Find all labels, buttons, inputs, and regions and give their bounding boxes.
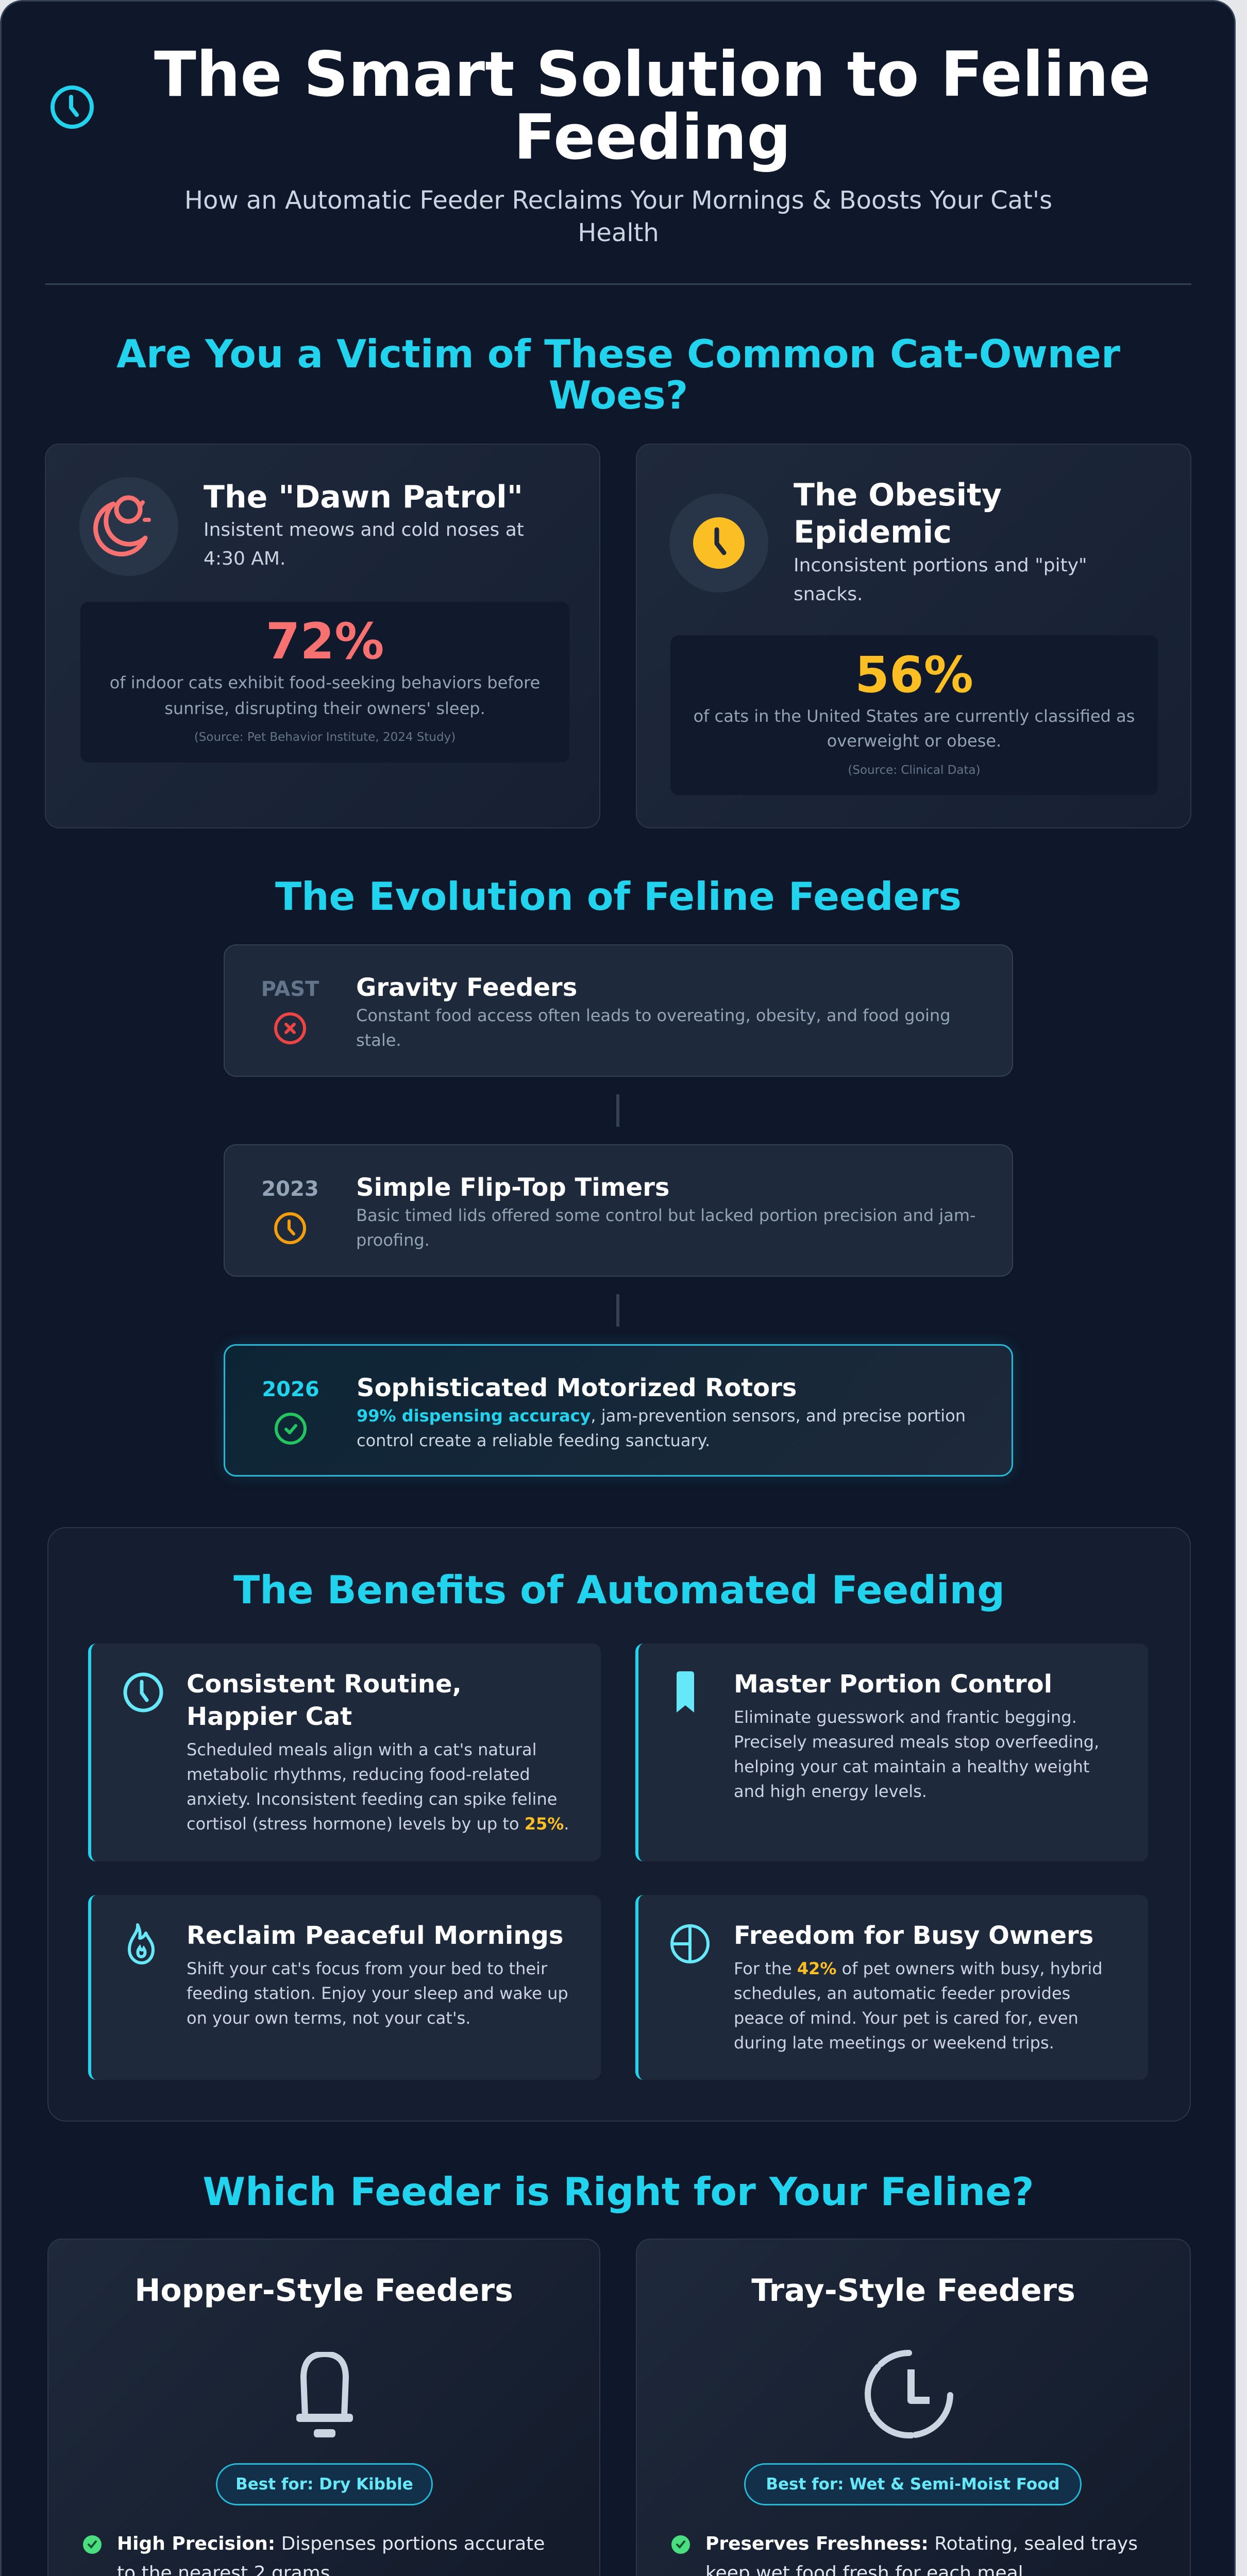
- benefit: busy owners: peace of mind. Your pet is cared for, even: [734, 2008, 1079, 2028]
- title: [154, 39, 1151, 174]
- benefit: busy owners: during late meetings or weekend trips.: [734, 2033, 1054, 2053]
- timeline: 2026: 2026: [262, 1378, 319, 1401]
- description: [794, 555, 1087, 605]
- timeline: past: [224, 944, 1013, 1077]
- timeline: 2026: 99% dispensing accuracy, jam-prevention sensors, and precise portion: [357, 1406, 966, 1426]
- timeline: past: PAST: [261, 977, 319, 1001]
- subtitle: How an Automatic Feeder Reclaims Your Mornings & Boosts Your Cat's: [184, 186, 1052, 215]
- benefit: busy owners: schedules, an automatic feeder provides: [734, 1984, 1070, 2003]
- title: Feeding: [514, 102, 791, 174]
- timeline: 2026: Sophisticated Motorized Rotors: [357, 1374, 797, 1402]
- stat: 72%: [80, 602, 569, 762]
- panel: obesity: [636, 444, 1191, 828]
- panel: dawn patrol: [45, 444, 600, 828]
- benefit: mornings: on your own terms, not your cat's.: [187, 2008, 470, 2028]
- title: The Smart Solution to Feline: [154, 39, 1151, 111]
- panel: benefits: [47, 1527, 1191, 2122]
- heading: woes: Woes?: [549, 372, 688, 418]
- benefit: mornings: Reclaim Peaceful Mornings: [187, 1921, 563, 1950]
- icon: check circle: [275, 1413, 307, 1445]
- list: Preserves Freshness: Rotating, sealed trays: [705, 2533, 1138, 2554]
- timeline: 2026: control create a reliable feeding sanctuary.: [357, 1431, 710, 1450]
- stat: 56%: (Source: Clinical Data): [848, 764, 981, 777]
- description: snacks.: [794, 584, 863, 605]
- description: Inconsistent portions and "pity": [794, 555, 1087, 576]
- title: The "Dawn Patrol": [204, 479, 523, 515]
- icon: clock: [669, 494, 768, 592]
- timeline: 2026: [224, 1344, 1013, 1477]
- icon: hopper: [296, 2352, 353, 2437]
- stat: 56%: overweight or obese.: [827, 731, 1001, 751]
- panel: hopper feeders: [47, 2239, 600, 2576]
- benefit: routine: anxiety. Inconsistent feeding can spike feline: [187, 1789, 557, 1809]
- panel: tray feeders: [636, 2239, 1191, 2576]
- timeline: past: Constant food access often leads to overeating, obesity, and food going: [356, 1006, 950, 1025]
- stat: 56%: of cats in the United States are currently classified as: [694, 706, 1135, 726]
- benefit: busy owners: [635, 1895, 1148, 2080]
- title: The Obesity: [794, 477, 1002, 513]
- header: clock icon: [50, 86, 94, 129]
- timeline: past: stale.: [356, 1030, 401, 1050]
- stat: 72%: sunrise, disrupting their owners' sleep.: [164, 699, 485, 718]
- list: [671, 2533, 1138, 2576]
- benefit: busy owners: For the 42% of pet owners with busy, hybrid: [734, 1959, 1103, 1978]
- benefit: busy owners: Freedom for Busy Owners: [734, 1921, 1093, 1950]
- icon: clock: [124, 1672, 163, 1713]
- benefit: mornings: Shift your cat's focus from your bed to their: [187, 1959, 547, 1978]
- benefit: mornings: [88, 1895, 601, 2080]
- badge: [216, 2463, 433, 2505]
- description: 4:30 AM.: [204, 548, 285, 569]
- benefit: portion: helping your cat maintain a healthy weight: [734, 1757, 1089, 1776]
- benefit: routine: metabolic rhythms, reducing food-related: [187, 1765, 530, 1784]
- benefit: portion: and high energy levels.: [734, 1782, 927, 1801]
- icon: flame: [128, 1923, 155, 1964]
- benefit: mornings: feeding station. Enjoy your sleep and wake up: [187, 1984, 568, 2003]
- icon: x circle: [274, 1012, 306, 1044]
- benefit: portion: Eliminate guesswork and frantic begging.: [734, 1707, 1077, 1727]
- benefit: routine: Happier Cat: [187, 1702, 352, 1731]
- panel: tray feeders: Tray-Style Feeders: [751, 2273, 1075, 2309]
- heading: The Benefits of Automated Feeding: [233, 1567, 1005, 1613]
- stat: 56%: 56%: [855, 646, 973, 704]
- description: [204, 519, 524, 569]
- panel: hopper feeders: Hopper-Style Feeders: [134, 2273, 513, 2309]
- title: Epidemic: [794, 514, 952, 550]
- icon: bookmark: [677, 1671, 694, 1713]
- heading: woes: Are You a Victim of These Common Cat-Owner: [116, 331, 1120, 377]
- description: Insistent meows and cold noses at: [204, 519, 524, 540]
- icon: clock: [274, 1212, 306, 1244]
- heading: which feeder: Which Feeder is Right for Your Feline?: [203, 2169, 1034, 2214]
- list: [83, 2533, 545, 2576]
- heading: woes: [116, 331, 1120, 418]
- timeline: 2023: Basic timed lids offered some control but lacked portion precision and jam-: [356, 1206, 976, 1225]
- subtitle: Health: [578, 218, 659, 247]
- badge: [744, 2463, 1082, 2505]
- title: [794, 477, 1002, 550]
- benefit: portion: [635, 1643, 1148, 1861]
- icon: pie: [670, 1924, 710, 1963]
- timeline: 2023: Simple Flip-Top Timers: [356, 1173, 669, 1202]
- stat: 72%: 72%: [266, 613, 384, 670]
- icon: moon: [79, 477, 178, 576]
- benefit: routine: [88, 1643, 601, 1861]
- stat: 72%: of indoor cats exhibit food-seeking behaviors before: [110, 673, 540, 692]
- stat: 72%: (Source: Pet Behavior Institute, 2024 Study): [194, 731, 456, 744]
- list: High Precision: Dispenses portions accurate: [117, 2533, 545, 2554]
- benefit: portion: Master Portion Control: [734, 1670, 1052, 1699]
- benefit: routine: cortisol (stress hormone) levels by up to 25%.: [187, 1814, 569, 1834]
- stat: 56%: [670, 635, 1158, 795]
- benefit: portion: Precisely measured meals stop overfeeding,: [734, 1732, 1099, 1752]
- benefit: routine: Consistent Routine,: [187, 1670, 462, 1699]
- heading: evolution: The Evolution of Feline Feeders: [275, 874, 962, 919]
- subtitle: [184, 186, 1052, 247]
- badge: Best for: Dry Kibble: [235, 2475, 413, 2494]
- timeline: 2023: 2023: [261, 1177, 319, 1201]
- icon: tray clock: [865, 2350, 953, 2438]
- benefit: routine: Scheduled meals align with a cat's natural: [187, 1740, 537, 1759]
- timeline: 2023: [224, 1144, 1013, 1277]
- badge: Best for: Wet & Semi-Moist Food: [766, 2475, 1060, 2494]
- timeline: past: Gravity Feeders: [356, 973, 577, 1002]
- timeline: 2023: proofing.: [356, 1230, 430, 1250]
